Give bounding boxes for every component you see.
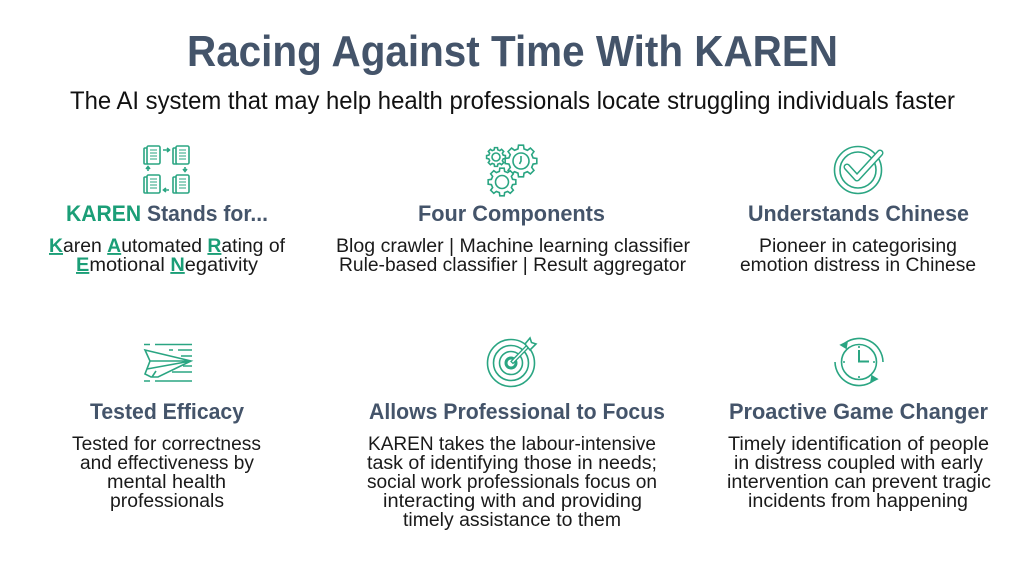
text block	[49, 236, 286, 276]
text block: task of identifying those in needs;	[367, 453, 657, 474]
text block: Blog crawler | Machine learning classifier	[336, 236, 691, 257]
text block	[72, 434, 261, 512]
panel: proactive game changer	[727, 338, 991, 512]
text block	[336, 236, 691, 276]
heading: Tested Efficacy	[90, 399, 245, 424]
icon: check mark	[834, 146, 882, 194]
text block	[727, 434, 991, 512]
text block: Rule-based classifier | Result aggregator	[339, 255, 687, 276]
panel: allows professional to focus	[367, 338, 665, 531]
panel: tested efficacy	[72, 344, 261, 512]
text block: timely assistance to them	[403, 510, 621, 531]
icon: clock with arrows	[835, 338, 883, 386]
text block: Tested for correctness	[72, 434, 261, 455]
text block: social work professionals focus on	[367, 472, 657, 493]
text block: emotion distress in Chinese	[740, 255, 976, 276]
text block: professionals	[110, 491, 224, 512]
text block: mental health	[107, 472, 226, 493]
text block: Karen Automated Rating of	[49, 236, 286, 257]
icon: paper plane	[144, 344, 192, 381]
text block: interacting with and providing	[383, 491, 642, 512]
panel: understands Chinese	[740, 146, 976, 276]
heading: KAREN Stands for...	[66, 201, 268, 226]
text block: Timely identification of people	[728, 434, 989, 455]
text block: KAREN takes the labour-intensive	[368, 434, 656, 455]
text block: intervention can prevent tragic	[727, 472, 991, 493]
icon: documents cycle	[144, 146, 189, 193]
subtitle: The AI system that may help health professionals locate struggling individuals faster	[70, 87, 955, 115]
text block	[367, 434, 657, 531]
text block: incidents from happening	[748, 491, 968, 512]
panel: four components	[336, 145, 691, 276]
text block: and effectiveness by	[80, 453, 255, 474]
heading: Proactive Game Changer	[729, 399, 988, 424]
text block: in distress coupled with early	[734, 453, 984, 474]
text block	[740, 236, 976, 276]
heading: Allows Professional to Focus	[369, 399, 665, 424]
panel: KAREN stands for	[49, 146, 286, 276]
text block: Pioneer in categorising	[759, 236, 957, 257]
heading: Understands Chinese	[748, 201, 969, 226]
title: Racing Against Time With KAREN	[187, 27, 838, 76]
text block: Emotional Negativity	[76, 255, 259, 276]
heading: Four Components	[418, 201, 605, 226]
icon: gears	[487, 145, 537, 196]
icon: target with arrow	[488, 338, 536, 386]
